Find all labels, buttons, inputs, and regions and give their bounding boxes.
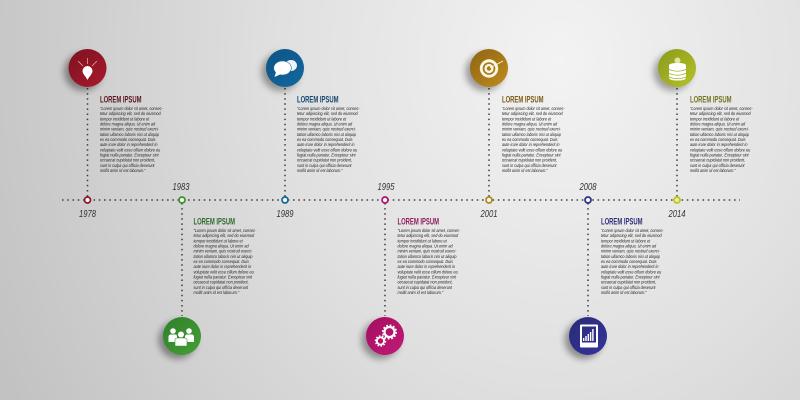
panel: 2014 text: tempor incididunt ut labore et xyxy=(690,116,740,121)
panel: 1989 text: tempor incididunt ut labore et xyxy=(297,116,347,121)
panel: 2001 text: ex ea commodo consequat. Duis xyxy=(502,137,558,142)
timeline nodes xyxy=(84,197,680,203)
panel: 1978 text: sunt in culpa qui officia deserunt xyxy=(100,163,155,168)
panel: 1978 text: ex ea commodo consequat. Duis xyxy=(100,137,156,142)
panel: 1983 text: mollit anim id est laborum." xyxy=(194,290,240,295)
panel: 1983 text: aute irure dolor in reprehenderit in xyxy=(194,264,252,269)
panel: 1983 text: "Lorem ipsum dolor sit amet, consec- xyxy=(194,228,257,233)
panel: 1989 text: voluptate velit esse cillum dolore eu xyxy=(297,147,358,152)
year labels: 1978 xyxy=(79,209,96,220)
panel: 1978 text: fugiat nulla pariatur. Excepteur sint xyxy=(100,152,159,158)
panel: 1978 text: aute irure dolor in reprehenderit in xyxy=(100,142,158,147)
panel: 1995 text: tation ullamco laboris nisi ut aliquip xyxy=(398,254,457,259)
panel: 2001 text xyxy=(502,94,565,173)
timeline axis xyxy=(62,88,740,316)
year labels: 2001 xyxy=(480,209,498,220)
panel: 1983 text: voluptate velit esse cillum dolore eu xyxy=(194,269,254,274)
panel: 1995 text: sunt in culpa qui officia deserunt xyxy=(398,285,453,290)
panel: 1989 text: "Lorem ipsum dolor sit amet, consec- xyxy=(297,106,360,111)
panel: 1995 text: minim veniam, quis nostrud exerci- xyxy=(398,248,457,254)
year labels: 1989 xyxy=(276,209,294,220)
panel: 1978 text: minim veniam, quis nostrud exerci- xyxy=(100,126,160,132)
panel: 1989 text: tetur adipiscing elit, sed do eiusmod xyxy=(297,111,358,116)
panel: 1989 text: sunt in culpa qui officia deserunt xyxy=(297,163,352,168)
panel: 2014 text: sunt in culpa qui officia deserunt xyxy=(690,163,745,168)
panel: 1978 text: tempor incididunt ut labore et xyxy=(100,116,150,121)
panel: 2008 text: minim veniam, quis nostrud exerci- xyxy=(601,248,661,254)
panel: 2001 text: dolore magna aliqua. Ut enim ad xyxy=(502,121,558,127)
panel: 1995 text: ex ea commodo consequat. Duis xyxy=(398,259,453,264)
panel: 2014 text: tetur adipiscing elit, sed do eiusmod xyxy=(690,111,751,116)
panel: 1995 text: tempor incididunt ut labore et xyxy=(398,238,447,243)
panel: 1995 text: tetur adipiscing elit, sed do eiusmod xyxy=(398,233,459,238)
panel: 1983 text: tetur adipiscing elit, sed do eiusmod xyxy=(194,233,255,238)
panel: 1989 text: fugiat nulla pariatur. Excepteur sint xyxy=(297,152,356,158)
panel: 2008 text: tetur adipiscing elit, sed do eiusmod xyxy=(601,233,662,238)
year labels: 1983 xyxy=(172,182,190,193)
panel: 1978 text: tation ullamco laboris nisi ut aliquip xyxy=(100,132,160,137)
panel: 2001 text: "Lorem ipsum dolor sit amet, consec- xyxy=(502,106,565,111)
panel: 1989 text: occaecat cupidatat non proident, xyxy=(297,157,352,163)
panel: 1983 text: tation ullamco laboris nisi ut aliquip xyxy=(194,254,253,259)
panel: 2014 text xyxy=(690,94,753,173)
panel: 1978 text: voluptate velit esse cillum dolore eu xyxy=(100,147,161,152)
panel: 2001 text: tetur adipiscing elit, sed do eiusmod xyxy=(502,111,563,116)
icon: speech bubbles badge xyxy=(262,49,304,91)
panel: 2008 text: tempor incididunt ut labore et xyxy=(601,238,651,243)
panel: 1978 text: tetur adipiscing elit, sed do eiusmod xyxy=(100,111,161,116)
panel: 1995 text: mollit anim id est laborum." xyxy=(398,290,444,295)
panel: 2008 text: "Lorem ipsum dolor sit amet, consec- xyxy=(601,228,664,233)
panel: 2014 text: mollit anim id est laborum." xyxy=(690,168,736,173)
year labels xyxy=(79,182,686,220)
panel: 2008 text: dolore magna aliqua. Ut enim ad xyxy=(601,243,657,249)
panel: 1989 text: dolore magna aliqua. Ut enim ad xyxy=(297,121,353,127)
panel: 2014 text: "Lorem ipsum dolor sit amet, consec- xyxy=(690,106,753,111)
icon: coin stack badge xyxy=(654,49,696,91)
panel: 2014 text: voluptate velit esse cillum dolore eu xyxy=(690,147,751,152)
icon: target badge xyxy=(466,49,508,91)
panel: 1983 text: occaecat cupidatat non proident, xyxy=(194,279,249,285)
panel: 1983 text: minim veniam, quis nostrud exerci- xyxy=(194,248,253,254)
panel: 1983 text: tempor incididunt ut labore et xyxy=(194,238,243,243)
panel: 1989 text xyxy=(297,94,360,173)
panel: 2014 text: aute irure dolor in reprehenderit in xyxy=(690,142,748,147)
panel: 2001 text: aute irure dolor in reprehenderit in xyxy=(502,142,560,147)
panel: 2001 text: mollit anim id est laborum." xyxy=(502,168,548,173)
panel: 2014 text: occaecat cupidatat non proident, xyxy=(690,157,745,163)
panel: 1978 text: "Lorem ipsum dolor sit amet, consec- xyxy=(100,106,163,111)
panel: 2008 text xyxy=(601,216,664,295)
panel: 1983 text: dolore magna aliqua. Ut enim ad xyxy=(194,243,249,249)
panel: 2001 text: voluptate velit esse cillum dolore eu xyxy=(502,147,563,152)
panel: 1995 text: occaecat cupidatat non proident, xyxy=(398,279,453,285)
year labels: 2014 xyxy=(668,209,686,220)
panel: 2008 text: tation ullamco laboris nisi ut aliquip xyxy=(601,254,661,259)
panel: 1983 text: LOREM IPSUM xyxy=(194,216,235,226)
panel: 2014 text: ex ea commodo consequat. Duis xyxy=(690,137,746,142)
panel: 1978 text: mollit anim id est laborum." xyxy=(100,168,146,173)
panel: 2008 text: aute irure dolor in reprehenderit in xyxy=(601,264,659,269)
panel: 2008 text: LOREM IPSUM xyxy=(601,216,643,226)
panel: 2014 text: fugiat nulla pariatur. Excepteur sint xyxy=(690,152,749,158)
panel: 2001 text: minim veniam, quis nostrud exerci- xyxy=(502,126,562,132)
panel: 1989 text: minim veniam, quis nostrud exerci- xyxy=(297,126,357,132)
panel: 1978 text xyxy=(100,94,163,173)
panel: 2008 text: fugiat nulla pariatur. Excepteur sint xyxy=(601,274,660,280)
panel: 1989 text: tation ullamco laboris nisi ut aliquip xyxy=(297,132,357,137)
panel: 2014 text: LOREM IPSUM xyxy=(690,94,732,104)
panel: 1995 text: LOREM IPSUM xyxy=(398,216,439,226)
panel: 2008 text: mollit anim id est laborum." xyxy=(601,290,647,295)
panel: 1983 text: fugiat nulla pariatur. Excepteur sint xyxy=(194,274,253,280)
panel: 2001 text: fugiat nulla pariatur. Excepteur sint xyxy=(502,152,561,158)
panel: 1983 text: sunt in culpa qui officia deserunt xyxy=(194,285,249,290)
panel: 2001 text: sunt in culpa qui officia deserunt xyxy=(502,163,557,168)
panel: 1989 text: ex ea commodo consequat. Duis xyxy=(297,137,353,142)
panel: 1995 text: voluptate velit esse cillum dolore eu xyxy=(398,269,458,274)
panel: 1995 text: dolore magna aliqua. Ut enim ad xyxy=(398,243,453,249)
icon: light bulb badge xyxy=(64,49,106,91)
panel: 1989 text: aute irure dolor in reprehenderit in xyxy=(297,142,355,147)
panel: 1989 text: LOREM IPSUM xyxy=(297,94,339,104)
panel: 1995 text: "Lorem ipsum dolor sit amet, consec- xyxy=(398,228,461,233)
panel: 2014 text: dolore magna aliqua. Ut enim ad xyxy=(690,121,746,127)
icon: people group badge xyxy=(158,317,201,359)
panel: 2001 text: tempor incididunt ut labore et xyxy=(502,116,552,121)
panel: 2008 text: occaecat cupidatat non proident, xyxy=(601,279,656,285)
panel: 1978 text: occaecat cupidatat non proident, xyxy=(100,157,155,163)
icon: gears badge xyxy=(362,317,404,359)
panel: 2008 text: voluptate velit esse cillum dolore eu xyxy=(601,269,662,274)
panel: 1995 text: aute irure dolor in reprehenderit in xyxy=(398,264,456,269)
panel: 1983 text xyxy=(194,216,257,295)
panel: 1978 text: dolore magna aliqua. Ut enim ad xyxy=(100,121,156,127)
year labels: 2008 xyxy=(579,182,597,193)
panel: 2014 text: tation ullamco laboris nisi ut aliquip xyxy=(690,132,750,137)
panel: 1989 text: mollit anim id est laborum." xyxy=(297,168,343,173)
panel: 2008 text: ex ea commodo consequat. Duis xyxy=(601,259,657,264)
panel: 2001 text: occaecat cupidatat non proident, xyxy=(502,157,557,163)
panel: 2008 text: sunt in culpa qui officia deserunt xyxy=(601,285,656,290)
panel: 1978 text: LOREM IPSUM xyxy=(100,94,142,104)
panel: 2001 text: tation ullamco laboris nisi ut aliquip xyxy=(502,132,562,137)
panel: 2014 text: minim veniam, quis nostrud exerci- xyxy=(690,126,750,132)
panel: 1983 text: ex ea commodo consequat. Duis xyxy=(194,259,249,264)
panel: 1995 text: fugiat nulla pariatur. Excepteur sint xyxy=(398,274,457,280)
year labels: 1995 xyxy=(378,182,395,193)
icon: tablet chart badge xyxy=(564,317,607,359)
panel: 2001 text: LOREM IPSUM xyxy=(502,94,544,104)
panel: 1995 text xyxy=(398,216,461,295)
